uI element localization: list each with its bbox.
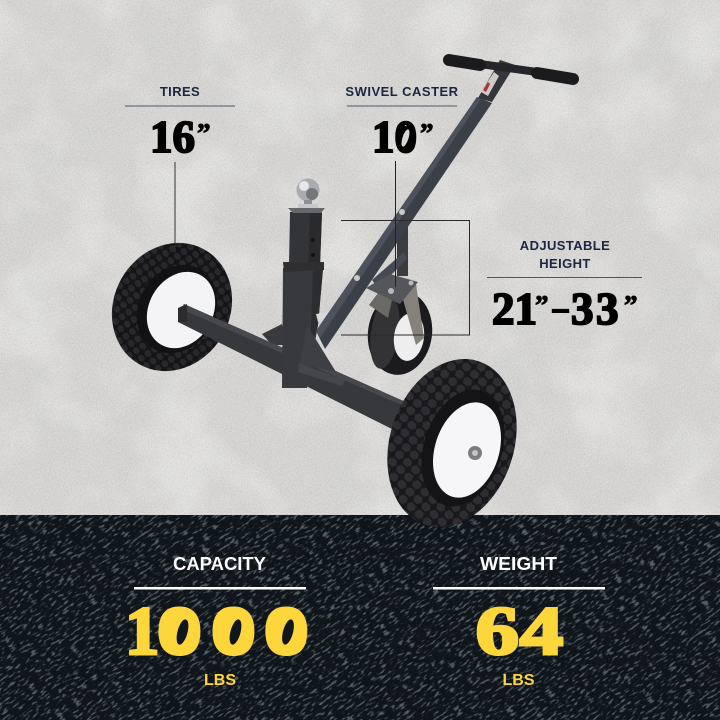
weight stat: 64 — [476, 592, 563, 669]
caster fork and mast — [366, 218, 424, 345]
slashed zero counters — [164, 611, 305, 653]
adjustable height callout: 3 — [596, 284, 618, 334]
product: tow dolly — [89, 60, 573, 544]
capacity stat: LBS — [204, 672, 236, 689]
adjustable height callout: – — [552, 292, 569, 325]
hitch ball — [296, 178, 320, 208]
weight stat: LBS — [502, 672, 535, 689]
adjustable height callout: 21 — [492, 284, 537, 334]
swivel caster callout: SWIVEL CASTER — [345, 84, 459, 99]
weight stat: WEIGHT — [480, 554, 557, 574]
tires callout: ” — [197, 118, 210, 148]
adjustable height callout: ” — [535, 290, 548, 320]
panel: dark textured footer — [0, 515, 720, 720]
capacity stat: 000 — [157, 594, 309, 670]
hitch post — [282, 208, 345, 388]
capacity stat: 1 — [125, 593, 160, 669]
adjustable height callout — [341, 220, 642, 335]
adjustable height callout: 3 — [571, 284, 594, 334]
capacity stat: CAPACITY — [173, 554, 266, 574]
left wheel — [89, 221, 255, 393]
rear gusset — [262, 324, 286, 345]
axle bar — [178, 304, 408, 429]
swivel caster callout: 10 — [372, 112, 417, 162]
tires callout: 16 — [150, 112, 195, 162]
tires callout: TIRES — [160, 84, 200, 99]
right wheel — [366, 342, 538, 544]
tires callout — [125, 84, 235, 252]
weight stat — [433, 554, 605, 689]
capacity stat — [125, 554, 309, 689]
swivel caster callout — [345, 84, 459, 287]
background: concrete wall — [0, 0, 720, 516]
tow handle — [316, 60, 573, 349]
adjustable height callout: ” — [624, 290, 638, 320]
swivel caster callout: ” — [420, 118, 434, 148]
adjustable height callout: ADJUSTABLE — [520, 238, 610, 253]
adjustable height callout: HEIGHT — [539, 256, 591, 271]
caster wheel — [362, 287, 438, 379]
slashed zero counter — [398, 126, 414, 150]
